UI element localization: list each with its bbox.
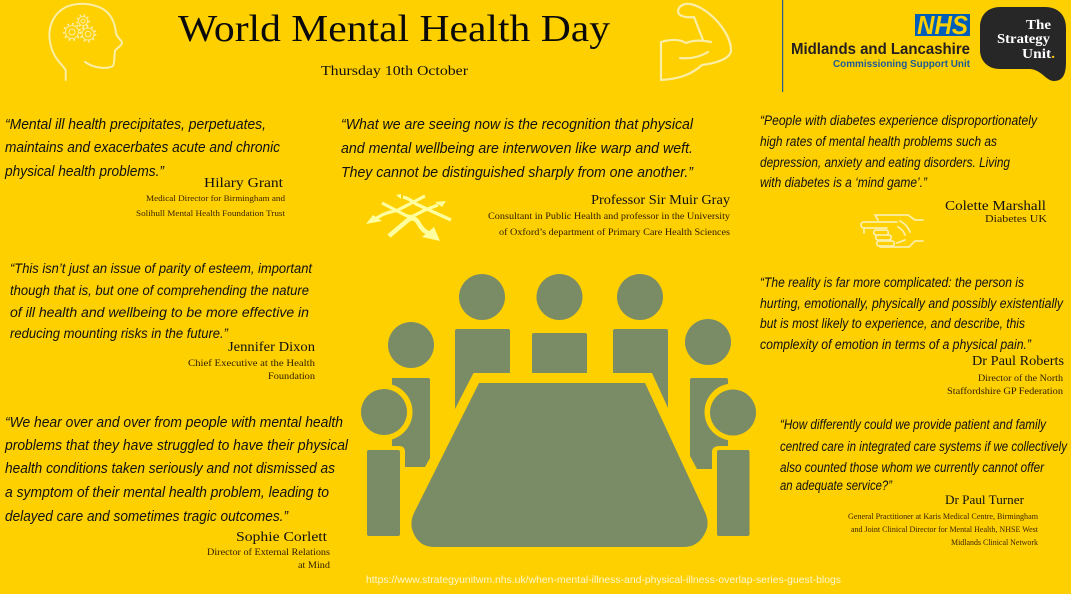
quote: Hilary Grant: Hilary Grant [204, 176, 283, 191]
quote: Jennifer Dixon [10, 261, 315, 382]
quote: Hilary Grant: physical health problems.” [4, 164, 165, 180]
person: back left [455, 274, 510, 409]
quote: Hilary Grant: “Mental ill health precipitates, perpetuates, [5, 117, 266, 133]
quote: Muir Gray: “What we are seeing now is the recognition that physical [341, 117, 694, 133]
quote: Jennifer Dixon: Jennifer Dixon [228, 340, 315, 355]
quote: Paul Turner: General Practitioner at Karis Medical Centre, Birmingham [848, 511, 1038, 521]
quote: Muir Gray: Consultant in Public Health and professor in the University [488, 211, 730, 222]
date subtitle: Thursday 10th October [321, 64, 468, 79]
quote: Paul Roberts: “The reality is far more complicated: the person is [760, 275, 1024, 290]
table [411, 383, 708, 547]
quote: Colette Marshall: Colette Marshall [945, 199, 1046, 214]
quote: Jennifer Dixon: “This isn’t just an issue of parity of esteem, important [10, 261, 313, 276]
quote: Colette Marshall: high rates of mental health problems such as [760, 134, 997, 149]
quote: Colette Marshall: “People with diabetes experience disproportionately [760, 113, 1038, 128]
quote: Paul Roberts: Director of the North [978, 373, 1063, 384]
quote: Jennifer Dixon: Foundation [268, 372, 315, 382]
logo: NHS Midlands and Lancashire: Midlands and Lancashire [791, 41, 970, 58]
quote: Sophie Corlett: at Mind [298, 561, 330, 571]
person: front left [361, 389, 407, 536]
logo: NHS Midlands and Lancashire: NHS [917, 10, 969, 40]
logo: The Strategy Unit speech bubble [980, 7, 1066, 81]
quote: Muir Gray: of Oxford’s department of Primary Care Health Sciences [499, 227, 730, 238]
quote: Sophie Corlett: Director of External Relations [207, 547, 330, 558]
quote: Jennifer Dixon: reducing mounting risks in the future.” [10, 326, 228, 341]
person: side left [356, 322, 434, 467]
quote: Paul Turner: Dr Paul Turner [945, 492, 1025, 507]
icon: flexed arm [661, 4, 731, 80]
quote: Colette Marshall: depression, anxiety and eating disorders. Living [760, 155, 1010, 170]
person: back centre [532, 274, 587, 373]
person: front right [710, 390, 756, 536]
title: World Mental Health Day [178, 8, 610, 50]
quote: Paul Turner [780, 417, 1068, 547]
logo: The Strategy Unit speech bubble: Strategy [997, 32, 1050, 47]
icon: people around a table [356, 274, 762, 547]
quote: Paul Roberts: but is most likely to experience, and describe, this [760, 316, 1025, 331]
divider line [782, 0, 783, 92]
quote: Jennifer Dixon: though that is, but one of comprehending the nature [10, 283, 309, 298]
quote: Paul Roberts [760, 275, 1064, 397]
quote: Colette Marshall: with diabetes is a ‘mind game’.” [760, 175, 927, 190]
quote: Sophie Corlett: Sophie Corlett [236, 530, 327, 545]
quote: Sophie Corlett: “We hear over and over from people with mental health [5, 415, 343, 431]
logo: The Strategy Unit speech bubble: Unit. [1022, 47, 1055, 62]
quote: Colette Marshall: Diabetes UK [985, 213, 1047, 225]
quote: Paul Roberts: complexity of emotion in terms of a physical pain.” [760, 337, 1031, 352]
person: side right [685, 319, 762, 469]
person: back right [613, 274, 668, 408]
quote: Paul Turner: Midlands Clinical Network [951, 537, 1039, 547]
logo: NHS Midlands and Lancashire: Commissioning Support Unit [833, 58, 970, 70]
quote: Jennifer Dixon: of ill health and wellbeing to be more effective in [10, 305, 309, 320]
quote: Sophie Corlett: health conditions taken seriously and not dismissed as [5, 461, 335, 477]
quote: Muir Gray: and mental wellbeing are interwoven like warp and weft. [341, 141, 693, 157]
icon: finger prick hand [861, 215, 923, 247]
quote: Paul Roberts: Dr Paul Roberts [972, 354, 1064, 369]
quote: Muir Gray: Professor Sir Muir Gray [591, 193, 730, 208]
quote: Hilary Grant: Medical Director for Birmingham and [146, 193, 286, 203]
quote: Muir Gray [341, 117, 730, 238]
quote: Hilary Grant: Solihull Mental Health Foundation Trust [136, 208, 286, 218]
quote: Sophie Corlett: a symptom of their mental health problem, leading to [5, 485, 329, 501]
quote: Jennifer Dixon: Chief Executive at the Health [188, 358, 315, 369]
quote: Paul Roberts: Staffordshire GP Federation [947, 386, 1063, 397]
logo: NHS Midlands and Lancashire [791, 10, 970, 70]
quote: Sophie Corlett: delayed care and sometimes tragic outcomes.” [5, 509, 289, 525]
quote: Sophie Corlett [4, 415, 349, 571]
logo: The Strategy Unit speech bubble: The [1026, 18, 1051, 33]
quote: Paul Turner: an adequate service?” [780, 478, 892, 493]
quote: Hilary Grant [4, 117, 286, 218]
quote: Muir Gray: They cannot be distinguished sharply from one another.” [341, 165, 694, 181]
icon: head with gears [49, 4, 122, 80]
quote: Hilary Grant: maintains and exacerbates acute and chronic [5, 140, 281, 156]
source URL: https://www.strategyunitwm.nhs.uk/when-mental-illness-and-physical-illness-overlap-series-guest-blogs [366, 574, 841, 586]
quote: Colette Marshall [760, 113, 1047, 225]
icon: interwoven arrows [366, 194, 451, 241]
quote: Sophie Corlett: problems that they have struggled to have their physical [4, 438, 349, 454]
quote: Paul Turner: and Joint Clinical Director for Mental Health, NHSE West [851, 524, 1039, 534]
